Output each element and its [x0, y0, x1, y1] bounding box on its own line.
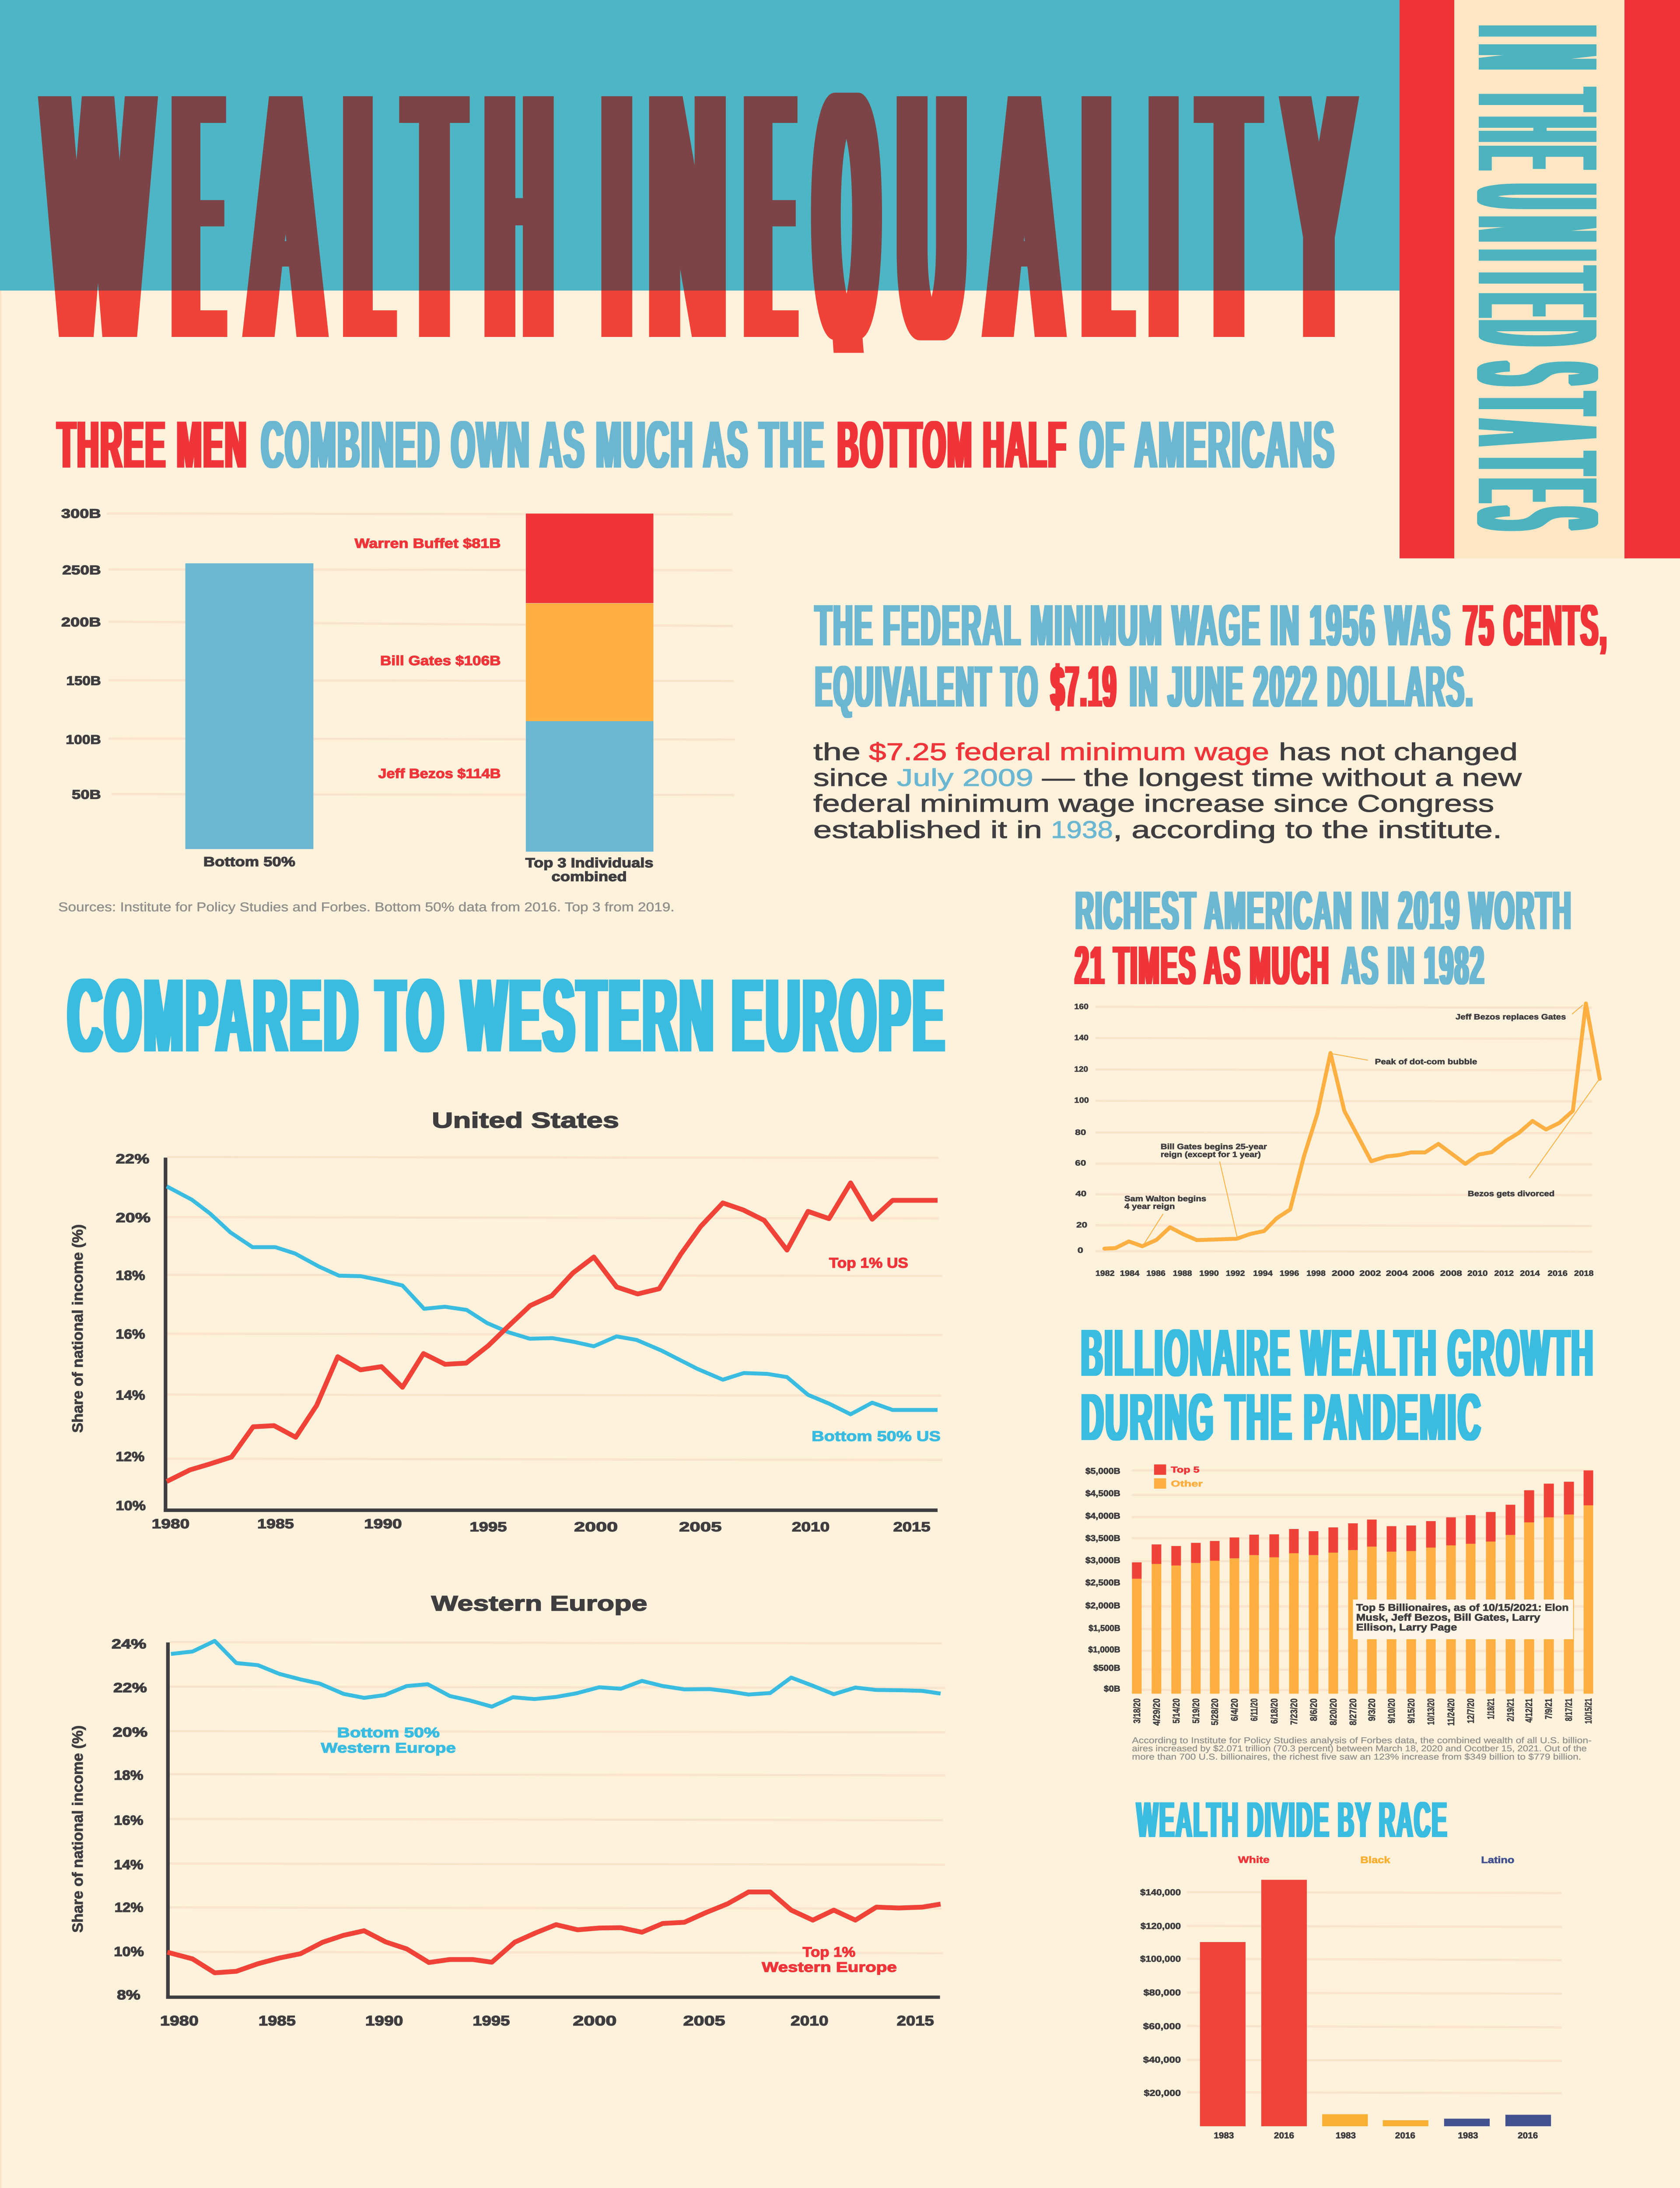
y axis labels: 12% [115, 1900, 144, 1915]
x axis labels: 2015 [897, 2013, 934, 2029]
chart: western europe [112, 1592, 945, 2029]
line label: bottom 50% western europe [321, 1725, 456, 1756]
legend: Other [1171, 1479, 1203, 1488]
line: bottom 50% western europe [171, 1641, 941, 1707]
line label: bottom 50% US: Bottom 50% US [812, 1429, 941, 1444]
annotations: Sam Walton begins [1124, 1195, 1206, 1203]
y axis labels: $1,500B [1088, 1623, 1120, 1633]
annotations: Peak of dot-com bubble [1375, 1058, 1477, 1066]
x axis labels: 1985 [259, 2013, 296, 2029]
y axis labels: $140,000 [1140, 1887, 1181, 1897]
x axis labels: 1996 [1280, 1269, 1299, 1278]
date labels: billionaire chart: 2/19/21 [1505, 1698, 1516, 1722]
callout: top 5 billionaires: Musk, Jeff Bezos, Bill Gates, Larry [1356, 1612, 1540, 1623]
x axis labels: 2018 [1574, 1269, 1594, 1278]
bar labels: individuals: Bill Gates $106B [380, 653, 501, 668]
x axis labels: 1988 [1173, 1269, 1192, 1278]
x axis labels: 1990 [365, 2013, 403, 2029]
footnote: According to Institute for Policy Studies analysis of Forbes data, the combined wealth of all U.S. billion- [1132, 1736, 1592, 1745]
bar: bottom 50% [186, 563, 313, 849]
title [38, 93, 1359, 353]
y axis labels: $40,000 [1143, 2055, 1181, 2065]
title: U [902, 21, 962, 411]
y axis labels: 80 [1075, 1128, 1086, 1137]
line: bottom 50% US [167, 1186, 938, 1414]
chart title: Western Europe [431, 1592, 647, 1615]
category labels: Top 3 Individuals [525, 855, 653, 870]
paragraph: minimum wage: federal minimum wage increase since Congress [813, 790, 1494, 817]
date labels: billionaire chart: 9/15/20 [1406, 1698, 1417, 1723]
line: top 1% western europe [167, 1892, 941, 1973]
data line [1104, 1003, 1600, 1248]
bar labels: individuals: Warren Buffet $81B [354, 536, 501, 551]
title: I [606, 21, 628, 411]
x axis labels: 1995 [472, 2013, 510, 2029]
bars: white [1200, 1880, 1307, 2126]
title: L [1087, 21, 1127, 411]
y axis labels [1074, 1003, 1089, 1255]
footnote: more than 700 U.S. billionaires, the richest five saw an 123% increase from $349 billion to $779 billion. [1132, 1752, 1581, 1761]
date labels: billionaire chart [1131, 1698, 1594, 1726]
date labels: billionaire chart: 9/10/20 [1386, 1698, 1397, 1723]
x axis labels: 2010 [1467, 1269, 1488, 1278]
title: A [254, 21, 318, 411]
title: A [993, 21, 1056, 411]
date labels: billionaire chart: 7/9/21 [1543, 1698, 1554, 1719]
date labels: billionaire chart: 5/14/20 [1171, 1698, 1182, 1723]
y axis labels: 14% [114, 1858, 144, 1872]
axis labels [61, 507, 101, 802]
y axis labels: 12% [116, 1449, 144, 1464]
date labels: billionaire chart: 1/18/21 [1485, 1698, 1496, 1719]
footnote [1132, 1736, 1592, 1761]
paragraph: minimum wage: since [813, 764, 888, 791]
y axis labels: $4,000B [1085, 1511, 1120, 1521]
y axis labels [112, 1637, 147, 2002]
heading: richest american [1075, 880, 1572, 996]
title: I [1153, 21, 1174, 411]
axis labels: 150B [66, 674, 101, 688]
line label: top 1% western europe [762, 1944, 897, 1975]
date labels: billionaire chart: 3/18/20 [1131, 1698, 1142, 1723]
axis labels: 100B [66, 733, 101, 747]
y axis labels: $500B [1093, 1663, 1120, 1673]
y axis title: united states: Share of national income (%) [70, 1224, 86, 1433]
date labels: billionaire chart: 8/20/20 [1328, 1698, 1339, 1725]
heading: billionaire wealth growth [1081, 1316, 1595, 1455]
footnote: aires increased by $2.071 trillion (70.3 percent) between March 18, 2020 and Ocotber 15, 2021. Out of the [1132, 1744, 1587, 1753]
group labels: Latino [1481, 1855, 1514, 1865]
x axis labels: 2008 [1440, 1269, 1462, 1278]
side banner [1400, 0, 1680, 558]
year labels: 1983 [1336, 2130, 1356, 2140]
axes [164, 1157, 938, 1512]
subtitle: IN THE UNITED STATES [1442, 27, 1634, 528]
y axis labels: $0B [1104, 1684, 1120, 1694]
x axis labels: 1992 [1226, 1269, 1245, 1278]
group labels: Black [1360, 1855, 1390, 1865]
x axis labels: 2012 [1494, 1269, 1514, 1278]
paragraph: minimum wage: has not changed [1279, 738, 1518, 765]
date labels: billionaire chart: 9/3/20 [1366, 1698, 1377, 1721]
heading: three men: COMBINED OWN AS MUCH AS THE [261, 407, 826, 482]
callout: top 5 billionaires: Ellison, Larry Page [1356, 1622, 1457, 1633]
title: N [653, 21, 722, 411]
x axis labels: 1994 [1253, 1269, 1273, 1278]
header band [0, 0, 1400, 291]
y axis labels: $120,000 [1141, 1921, 1181, 1931]
group labels [1238, 1854, 1514, 1865]
title: Q [819, 21, 874, 411]
axis labels: 200B [61, 615, 101, 629]
date labels: billionaire chart: 8/17/21 [1563, 1698, 1574, 1721]
line label: top 1% western europe: Western Europe [762, 1959, 897, 1975]
category labels [203, 854, 653, 884]
title: W [49, 21, 148, 411]
title: H [489, 21, 549, 411]
paragraph: minimum wage: $7.25 federal minimum wage [869, 738, 1269, 765]
y axis labels: 0 [1078, 1246, 1083, 1255]
y axis labels: 10% [114, 1944, 144, 1959]
group labels: White [1238, 1854, 1270, 1865]
y axis labels: $4,500B [1085, 1489, 1120, 1498]
bar labels: individuals: Jeff Bezos $114B [378, 766, 501, 781]
x axis labels: 1982 [1096, 1269, 1115, 1278]
y axis labels: 18% [114, 1768, 144, 1783]
x axis labels: 2002 [1359, 1269, 1381, 1278]
title: L [349, 21, 388, 411]
line label: top 1% US: Top 1% US [829, 1255, 908, 1271]
x axis labels: 2010 [791, 2013, 828, 2029]
y axis labels: $3,500B [1085, 1533, 1120, 1543]
y axis labels: $2,500B [1085, 1578, 1120, 1587]
sources note: Sources: Institute for Policy Studies and Forbes. Bottom 50% data from 2016. Top 3 from 2019. [58, 900, 675, 914]
text: Y [1288, 21, 1350, 411]
y axis labels: $80,000 [1144, 1988, 1181, 1997]
date labels: billionaire chart: 5/28/20 [1209, 1698, 1220, 1725]
x axis labels: 1980 [160, 2013, 199, 2029]
chart: richest american line [1074, 1003, 1600, 1278]
title: T [1204, 21, 1255, 411]
line label: bottom 50% western europe: Western Europe [321, 1740, 456, 1756]
y axis labels: 24% [112, 1637, 146, 1652]
y axis labels: 40 [1075, 1189, 1086, 1198]
annotations [1124, 1013, 1566, 1211]
heading: minimum wage: $7.19 [1051, 654, 1117, 719]
paragraph: minimum wage: July 2009 [897, 764, 1033, 791]
x axis labels: 1990 [364, 1516, 402, 1531]
axis labels: 300B [61, 507, 101, 521]
y axis labels: 16% [116, 1326, 145, 1342]
heading: three men [57, 407, 1336, 482]
y axis labels: 8% [117, 1988, 140, 2002]
axis labels: 50B [72, 787, 101, 802]
x axis labels: 2004 [1386, 1269, 1408, 1278]
x axis labels: 1985 [257, 1516, 294, 1531]
y axis labels: $100,000 [1140, 1954, 1181, 1964]
heading: three men: BOTTOM HALF [837, 407, 1068, 482]
callout: top 5 billionaires [1353, 1599, 1573, 1639]
chart: united states [116, 1108, 942, 1534]
x axis labels [160, 2013, 934, 2029]
y axis labels: 60 [1075, 1159, 1086, 1168]
date labels: billionaire chart: 4/12/21 [1523, 1698, 1534, 1723]
category labels: combined [551, 869, 627, 884]
y axis labels: 100 [1074, 1096, 1089, 1105]
y axis labels: 120 [1074, 1065, 1088, 1073]
date labels: billionaire chart: 6/4/20 [1229, 1698, 1240, 1721]
x axis labels: 2016 [1547, 1269, 1568, 1278]
title: T [409, 21, 460, 411]
paragraph: minimum wage [813, 738, 1522, 843]
y axis labels: 10% [116, 1498, 146, 1513]
date labels: billionaire chart: 11/24/20 [1446, 1698, 1456, 1726]
date labels: billionaire chart: 10/13/20 [1425, 1698, 1436, 1725]
paragraph: minimum wage: the [813, 738, 861, 765]
date labels: billionaire chart: 7/23/20 [1288, 1698, 1299, 1725]
heading: three men: THREE MEN [57, 407, 248, 482]
chart: wealth divide by race [1140, 1854, 1562, 2140]
y axis labels: 20% [116, 1210, 150, 1225]
y axis labels: $20,000 [1144, 2088, 1181, 2098]
y axis labels: $3,000B [1085, 1555, 1120, 1565]
leader lines [1143, 1005, 1599, 1245]
annotations: 4 year reign [1124, 1202, 1175, 1211]
year labels: 1983 [1214, 2130, 1234, 2140]
y axis labels [1140, 1887, 1181, 2098]
y axis labels: 22% [116, 1151, 149, 1166]
x axis labels: 2005 [683, 2013, 725, 2029]
callout: top 5 billionaires: Top 5 Billionaires, as of 10/15/2021: Elon [1356, 1602, 1569, 1613]
heading: minimum wage [815, 593, 1608, 719]
annotations: Bezos gets divorced [1468, 1189, 1554, 1198]
y axis labels: $5,000B [1085, 1466, 1120, 1476]
bars: latino [1444, 2115, 1551, 2126]
annotations: reign (except for 1 year) [1161, 1150, 1261, 1159]
paragraph: minimum wage: 1938 [1051, 816, 1113, 843]
x axis labels: 1990 [1199, 1269, 1219, 1278]
line label: bottom 50% western europe: Bottom 50% [337, 1725, 440, 1740]
y axis labels: 20 [1076, 1221, 1087, 1229]
x axis labels: 2000 [573, 2013, 616, 2029]
x axis labels: 2006 [1412, 1269, 1435, 1278]
y axis labels: 14% [116, 1388, 145, 1403]
year labels: 1983 [1458, 2130, 1478, 2140]
line label: top 1% western europe: Top 1% [803, 1944, 855, 1960]
date labels: billionaire chart: 5/19/20 [1190, 1698, 1201, 1723]
date labels: billionaire chart: 8/27/20 [1348, 1698, 1358, 1725]
date labels: billionaire chart: 6/18/20 [1269, 1698, 1280, 1724]
y axis title: western europe: Share of national income (%) [70, 1725, 86, 1933]
x axis labels: 2000 [574, 1519, 618, 1534]
x axis labels: 1998 [1306, 1269, 1326, 1278]
paragraph: minimum wage: , according to the institute. [1113, 816, 1502, 843]
y axis labels: 20% [113, 1725, 147, 1739]
bar: top 3 stacked [526, 514, 653, 852]
x axis labels: 1986 [1146, 1269, 1166, 1278]
date labels: billionaire chart: 6/11/20 [1249, 1698, 1260, 1721]
year labels: 2016 [1395, 2130, 1415, 2140]
annotations: Jeff Bezos replaces Gates [1456, 1013, 1566, 1021]
legend [1154, 1464, 1203, 1489]
y axis labels: 140 [1074, 1034, 1088, 1042]
y axis labels: 160 [1074, 1003, 1088, 1011]
heading: minimum wage: EQUIVALENT TO [815, 654, 1039, 719]
date labels: billionaire chart: 4/29/20 [1151, 1698, 1162, 1726]
y axis labels [1085, 1466, 1120, 1694]
legend: Top 5 [1171, 1465, 1200, 1475]
date labels: billionaire chart: 10/15/21 [1583, 1698, 1594, 1724]
x axis labels: 2015 [893, 1519, 931, 1534]
chart: three men vs bottom half [58, 507, 735, 914]
y axis labels: $1,000B [1088, 1645, 1120, 1654]
title: E [751, 21, 790, 411]
paragraph: minimum wage: established it in [813, 816, 1042, 843]
x axis labels: 2010 [792, 1519, 830, 1534]
category labels: Bottom 50% [203, 854, 295, 869]
bars: black [1322, 2114, 1428, 2126]
year labels: 2016 [1518, 2130, 1538, 2140]
paragraph: minimum wage: — the longest time without a new [1042, 764, 1522, 791]
axes [166, 1642, 940, 1999]
x axis labels: 1995 [470, 1519, 507, 1534]
y axis labels: 16% [114, 1813, 144, 1828]
x axis labels: 1984 [1120, 1269, 1139, 1278]
date labels: billionaire chart: 8/6/20 [1308, 1698, 1319, 1721]
chart title: United States [432, 1108, 619, 1133]
year labels [1214, 2130, 1538, 2140]
line: top 1% US [167, 1183, 938, 1481]
y axis labels: $2,000B [1085, 1601, 1120, 1610]
chart: billionaire wealth stacked bars [1085, 1464, 1593, 1761]
axis labels: 250B [62, 563, 101, 577]
title: E [178, 21, 218, 411]
x axis labels: 2000 [1332, 1269, 1354, 1278]
x axis labels [1096, 1269, 1594, 1278]
bars: top 5 [1132, 1470, 1593, 1579]
y axis labels: 22% [113, 1680, 147, 1695]
x axis labels: 2005 [679, 1519, 721, 1534]
y axis labels: $60,000 [1143, 2021, 1181, 2031]
annotations: Bill Gates begins 25-year [1161, 1143, 1267, 1151]
x axis labels: 2014 [1520, 1269, 1540, 1278]
bars: other [1132, 1505, 1593, 1694]
bar labels: individuals [354, 536, 501, 781]
year labels: 2016 [1274, 2130, 1294, 2140]
x axis labels: 1980 [152, 1516, 189, 1531]
y axis labels: 18% [116, 1268, 145, 1283]
y axis labels [116, 1151, 150, 1513]
x axis labels [152, 1516, 931, 1534]
date labels: billionaire chart: 12/7/20 [1465, 1698, 1476, 1723]
